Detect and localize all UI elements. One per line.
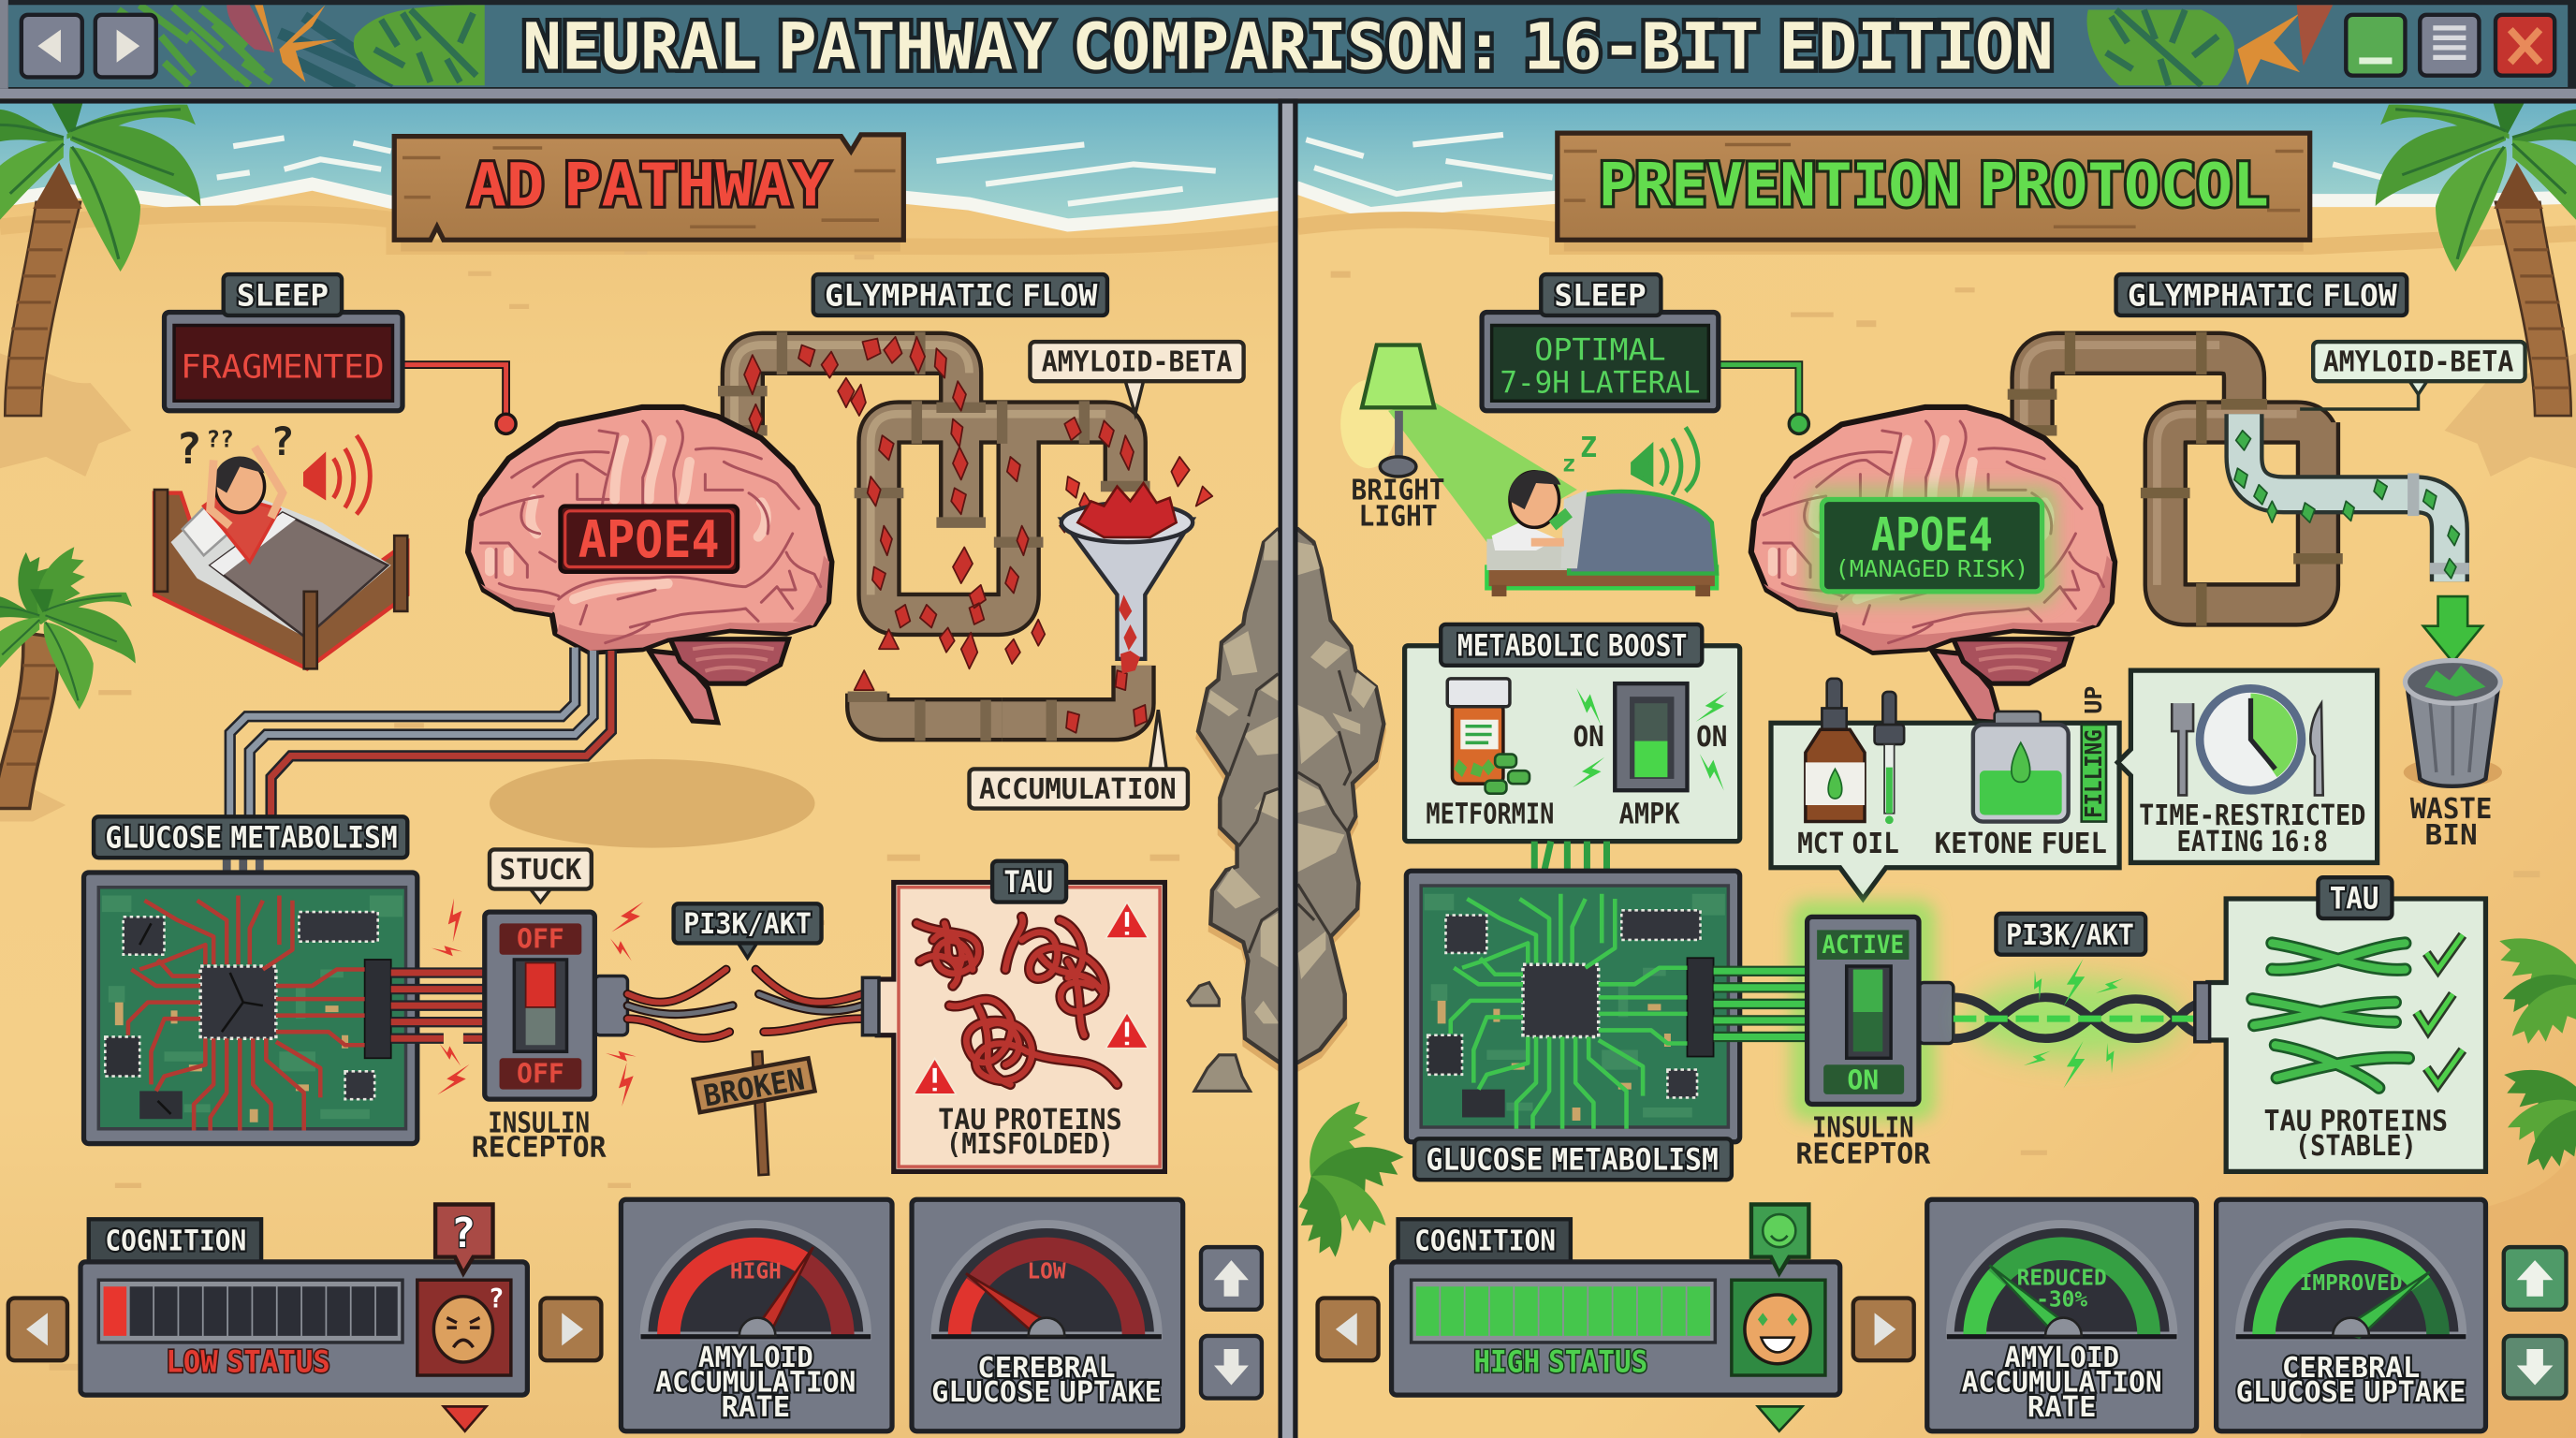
pebbles <box>1188 983 1251 1091</box>
sleep display: optimal <box>1482 274 1808 433</box>
label: glymphatic flow left: GLYMPHATIC FLOW <box>825 279 1098 313</box>
debris: amyloid clumps <box>744 337 1147 733</box>
lamp beam glow <box>1340 379 1577 542</box>
label: PI3K/AKT right: PI3K/AKT <box>2006 919 2134 952</box>
label: APOE4 managed risk: APOE4 <box>1871 507 1993 562</box>
label: sleep right <box>1541 274 1661 315</box>
sleep display: optimal: 7-9H LATERAL <box>1500 366 1701 400</box>
label: metabolic boost: METABOLIC BOOST <box>1457 629 1687 663</box>
marker: red triangle <box>444 1406 487 1431</box>
insulin receptor switch: active: ACTIVE <box>1822 932 1904 960</box>
palm: bottom left <box>0 1115 91 1283</box>
glymphatic pipes: clogged <box>718 332 1212 741</box>
gauge: cerebral glucose low: LOW <box>1027 1259 1066 1284</box>
glass pipe with clearance <box>2234 414 2469 581</box>
glymphatic pipes: clear <box>2008 332 2469 626</box>
palms: bottom right edge <box>2499 938 2576 1170</box>
gauge: cerebral glucose improved: GLUCOSE UPTAKE <box>2236 1376 2466 1409</box>
panel: time-restricted eating: TIME-RESTRICTED <box>2139 800 2365 832</box>
twisted signalling wires <box>1954 959 2208 1089</box>
label: waste bin <box>2410 793 2492 852</box>
label: tau: TAU <box>1003 866 1053 900</box>
button: close <box>2496 15 2554 76</box>
panel: tau stable: TAU PROTEINS <box>2264 1106 2448 1138</box>
label: tau <box>992 861 1066 902</box>
label: cognition right <box>1398 1219 1571 1264</box>
callout: accumulation: ACCUMULATION <box>979 773 1177 806</box>
label: cognition <box>89 1219 261 1264</box>
progress bar: high <box>1412 1280 1715 1343</box>
panel: tau misfolded: (MISFOLDED) <box>946 1128 1114 1161</box>
label: waste bin: WASTE <box>2410 793 2492 826</box>
icon: clock <box>2200 688 2302 790</box>
gauge: amyloid accumulation reduced: ACCUMULATION <box>1962 1367 2162 1400</box>
callout: stuck: STUCK <box>500 854 581 887</box>
gauge: amyloid accumulation high: RATE <box>721 1391 790 1424</box>
button: menu <box>2420 15 2479 76</box>
icon: bright light lamp: LIGHT <box>1358 501 1438 534</box>
insulin receptor switch: stuck off: OFF <box>517 924 564 955</box>
switch glow <box>1791 901 1936 1121</box>
button: back <box>22 15 82 77</box>
panel: metabolic boost: AMPK <box>1619 798 1680 830</box>
sleep display: fragmented: FRAGMENTED <box>181 348 385 387</box>
nav button: up left <box>1201 1247 1262 1310</box>
callout: stuck <box>490 849 592 902</box>
callout: amyloid-beta right <box>2300 342 2525 409</box>
funnel with amyloid <box>1061 483 1193 674</box>
label: insulin receptor left: INSULIN <box>488 1107 590 1139</box>
panel: metabolic boost: METFORMIN <box>1426 798 1554 830</box>
icon: fork <box>2172 703 2193 795</box>
sleep zzz: Z <box>1580 432 1597 464</box>
decor: tropical leaves left <box>118 5 485 91</box>
gauge: amyloid accumulation high: HIGH <box>730 1259 782 1284</box>
panel: tau stable <box>2195 877 2485 1171</box>
nav button: left arrow right panel <box>1318 1299 1379 1360</box>
gauge: amyloid accumulation reduced: REDUCED <box>2017 1266 2107 1290</box>
cognition panel: high <box>1392 1219 1840 1395</box>
insulin receptor switch: stuck off <box>432 895 645 1107</box>
panel: metabolic boost <box>1405 624 1740 842</box>
warning triangles <box>914 902 1149 1094</box>
icon: dropper <box>1875 692 1904 824</box>
cognition panel: high: HIGH STATUS <box>1473 1346 1647 1380</box>
gauge: cerebral glucose low: GLUCOSE UPTAKE <box>931 1376 1162 1409</box>
sparks: signal <box>2024 959 2124 1089</box>
brain: AD side <box>468 407 831 723</box>
icon: ketone jar <box>1973 712 2069 822</box>
nav button: left arrow <box>8 1299 67 1360</box>
broken signalling wires <box>627 970 862 1038</box>
label: glucose metabolism: GLUCOSE METABOLISM <box>105 822 398 856</box>
panel: time-restricted eating <box>2117 670 2378 862</box>
label: APOE4 managed risk: (MANAGED RISK) <box>1835 555 2029 582</box>
question marks <box>176 418 295 474</box>
cognition panel: low <box>80 1219 527 1395</box>
label: cognition right: COGNITION <box>1414 1225 1556 1258</box>
panel: MCT oil and ketone fuel: KETONE FUEL <box>1935 828 2107 860</box>
nav button: right arrow right panel <box>1853 1299 1914 1360</box>
stable fibres <box>2252 943 2408 1088</box>
wires: board to switch right <box>1714 971 1808 1036</box>
marker: green triangle <box>1758 1406 1802 1431</box>
gauge: filling up: UP <box>2080 686 2107 714</box>
gauge: cerebral glucose improved <box>2217 1199 2485 1431</box>
central divider <box>1278 98 1298 1438</box>
panel: MCT oil and ketone fuel: MCT OIL <box>1797 828 1899 860</box>
decor: tropical leaves right <box>2087 5 2333 85</box>
panel: tau misfolded <box>862 861 1164 1171</box>
gauge: amyloid accumulation reduced: AMYLOID <box>2004 1342 2119 1374</box>
label: insulin receptor right <box>1795 1112 1930 1171</box>
sign: broken: BROKEN <box>701 1063 807 1114</box>
tangled proteins <box>916 917 1117 1084</box>
check marks <box>2417 935 2463 1084</box>
button: forward <box>95 15 156 77</box>
icon: happy face <box>1732 1280 1825 1375</box>
label: APOE4 risk: APOE4 <box>578 510 720 569</box>
label: sleep right: SLEEP <box>1554 279 1647 313</box>
callout: amyloid-beta left <box>1030 342 1244 414</box>
label: insulin receptor right: INSULIN <box>1812 1112 1914 1145</box>
callout: accumulation <box>970 710 1188 809</box>
callout: amyloid-beta left: AMYLOID-BETA <box>1042 346 1232 379</box>
panel: metabolic boost: ON <box>1696 721 1727 754</box>
gauge: filling up: FILLING <box>2080 729 2107 818</box>
label: waste bin: BIN <box>2425 819 2478 852</box>
icon: restful sleeper in bed <box>1486 427 1717 596</box>
label: insulin receptor right: RECEPTOR <box>1795 1138 1930 1171</box>
label: glucose metabolism right: GLUCOSE METABOLISM <box>1426 1144 1719 1178</box>
rock column <box>1198 529 1383 1069</box>
sleep zzz <box>1562 432 1597 477</box>
insulin receptor switch: stuck off: OFF <box>517 1059 564 1090</box>
palm: top left <box>0 100 200 477</box>
icon: AMPK switch <box>1615 683 1687 790</box>
sleep display: fragmented <box>165 274 516 433</box>
icon: metformin bottle <box>1447 679 1530 794</box>
icon: bright light lamp <box>1352 345 1445 534</box>
label: insulin receptor left: RECEPTOR <box>472 1132 607 1165</box>
panel: tau misfolded: TAU PROTEINS <box>938 1104 1122 1137</box>
panel: metabolic boost: ON <box>1573 721 1604 754</box>
gauge: amyloid accumulation high <box>621 1199 892 1431</box>
heading sign: prevention protocol: PREVENTION PROTOCOL <box>1599 150 2269 219</box>
gauge: cerebral glucose low <box>912 1199 1183 1431</box>
title text: NEURAL PATHWAY COMPARISON: 16-BIT EDITION <box>522 10 2054 85</box>
label: APOE4 managed risk <box>1808 487 2056 605</box>
icon: knife <box>2310 703 2323 795</box>
background: left beach panel <box>0 102 1281 1438</box>
heading sign: prevention protocol <box>1558 133 2310 252</box>
label: tau right <box>2318 877 2392 918</box>
icon: MCT oil bottle <box>1806 679 1865 822</box>
question marks: ?? <box>206 425 234 452</box>
heading sign: AD pathway <box>394 135 903 252</box>
icon: loud speaker <box>305 435 370 514</box>
label: sleep <box>224 274 342 315</box>
panel: time-restricted eating: EATING 16:8 <box>2177 826 2328 858</box>
sparks: green <box>1567 684 1734 795</box>
title bar <box>0 0 2576 104</box>
gauge: cerebral glucose low: CEREBRAL <box>977 1352 1116 1385</box>
gauge: cerebral glucose improved: CEREBRAL <box>2282 1352 2420 1385</box>
nav button: down left <box>1201 1336 1262 1399</box>
sleep display: optimal: OPTIMAL <box>1534 333 1666 367</box>
gauge: amyloid accumulation high: ACCUMULATION <box>655 1367 856 1400</box>
insulin receptor switch: active <box>1808 917 1954 1104</box>
label: sleep: SLEEP <box>237 279 329 313</box>
nav button: right arrow <box>540 1299 601 1360</box>
question marks: ? <box>176 424 202 474</box>
insulin receptor switch: active: ON <box>1847 1065 1879 1096</box>
icon: quiet speaker <box>1633 427 1698 494</box>
panel: MCT oil and ketone fuel <box>1771 679 2119 899</box>
gauge: amyloid accumulation reduced <box>1927 1199 2197 1431</box>
sleep zzz: z <box>1562 450 1576 477</box>
gauge: cerebral glucose improved: IMPROVED <box>2300 1271 2402 1296</box>
label: cognition: COGNITION <box>105 1225 246 1258</box>
question marks: ? <box>271 418 295 464</box>
wires: board to switch left <box>391 973 487 1038</box>
gauge: amyloid accumulation high: AMYLOID <box>698 1342 813 1374</box>
cognition panel: low: LOW STATUS <box>166 1346 330 1380</box>
bubble: question: ? <box>451 1210 476 1257</box>
circuit board: glucose metabolism right <box>1406 871 1740 1180</box>
icon: waste bin <box>2404 661 2502 787</box>
palm: mid left <box>0 540 136 822</box>
icon: worried face: ? <box>489 1284 504 1314</box>
panel: tau stable: (STABLE) <box>2295 1130 2417 1163</box>
gauge: amyloid accumulation reduced: -30% <box>2036 1287 2087 1312</box>
brain: prevention side <box>1751 407 2115 723</box>
progress bar: low <box>98 1280 402 1343</box>
icon: worried face <box>417 1280 511 1375</box>
button: minimize <box>2346 15 2405 76</box>
callout: amyloid-beta right: AMYLOID-BETA <box>2323 346 2513 379</box>
icon: bright light lamp: BRIGHT <box>1352 475 1445 507</box>
wires: brain to glucose metabolism <box>230 648 611 818</box>
bubble: question <box>435 1204 493 1273</box>
label: PI3K/AKT left <box>674 903 822 958</box>
sparks <box>432 895 645 1107</box>
connectors: boost to board <box>1534 842 1606 871</box>
icon: restless sleeper in bed <box>154 418 407 668</box>
nav button: up right <box>2504 1247 2566 1310</box>
arrow: to waste bin <box>2423 596 2482 662</box>
circuit board: glucose metabolism left <box>84 816 417 1144</box>
debris: falling chips <box>1060 457 1212 533</box>
nav button: down right <box>2504 1336 2566 1399</box>
gauge: amyloid accumulation reduced: RATE <box>2027 1391 2097 1424</box>
shadow: sand patch <box>490 759 815 848</box>
label: tau right: TAU <box>2330 883 2378 917</box>
label: glymphatic flow right: GLYMPHATIC FLOW <box>2128 279 2398 313</box>
sign: broken <box>694 1051 815 1175</box>
label: insulin receptor left <box>472 1107 607 1165</box>
background: right beach panel <box>1295 102 2576 1438</box>
heading sign: AD pathway: AD PATHWAY <box>468 150 829 219</box>
palm: right panel lower left <box>1299 1101 1404 1257</box>
label: PI3K/AKT left: PI3K/AKT <box>683 908 812 941</box>
bubble: happy <box>1751 1204 1808 1273</box>
palm: top right <box>2376 100 2576 477</box>
